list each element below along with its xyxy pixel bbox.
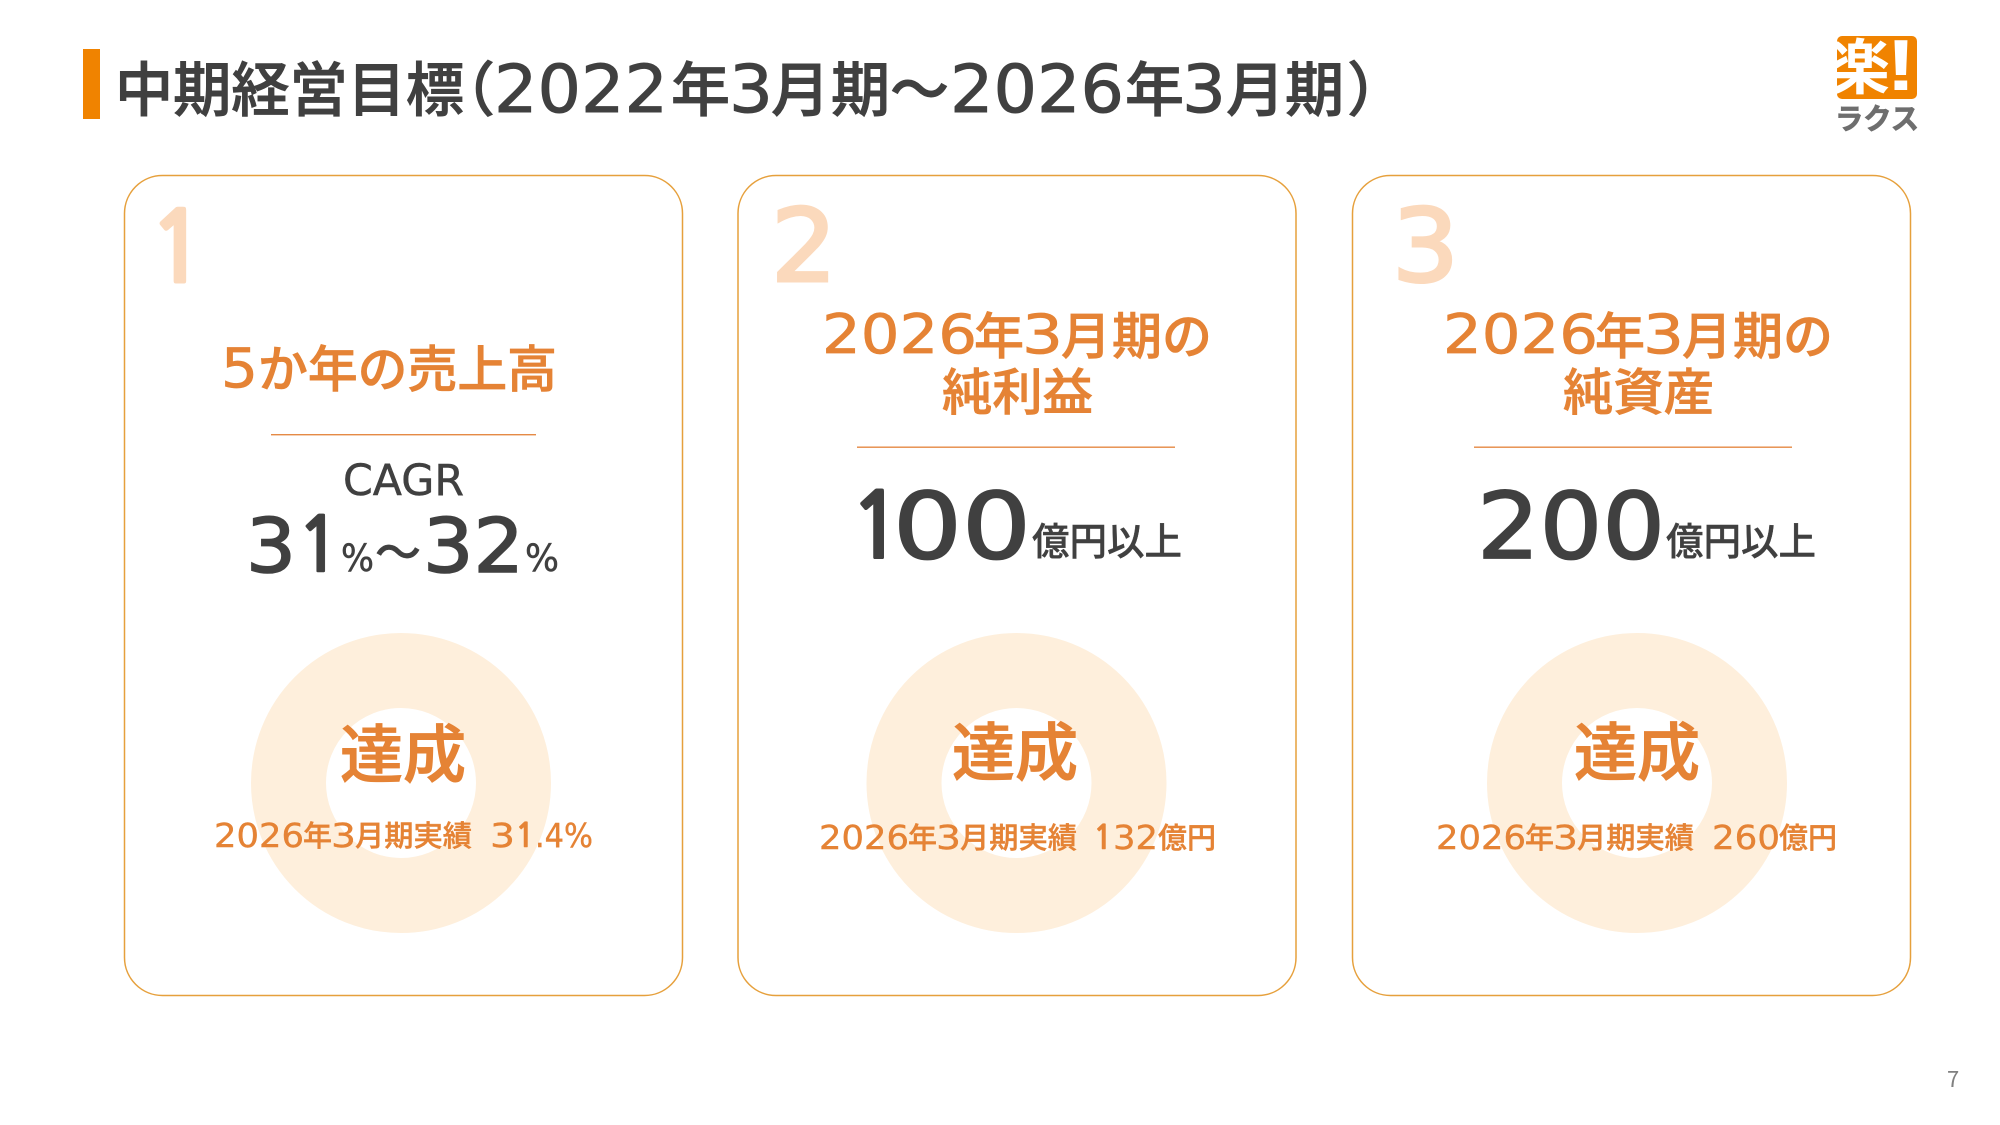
CAGR value: 3 [246, 502, 296, 590]
panel number: 2 [771, 187, 837, 305]
target value: 億円以上 [1032, 511, 1182, 566]
divider [1474, 446, 1792, 448]
CAGR value: ～ [375, 517, 421, 583]
panel heading [822, 297, 1212, 425]
divider [857, 446, 1175, 448]
CAGR value: 32 [423, 502, 524, 590]
CAGR value [246, 502, 559, 590]
title: 期 [1285, 43, 1344, 128]
actual result: 億円 [1158, 815, 1216, 857]
target value: 200 [1477, 473, 1665, 580]
title: 3 [729, 51, 773, 128]
achievement ring [1524, 670, 1750, 896]
panel: net income target [738, 176, 1296, 996]
actual result [214, 813, 593, 855]
card border [1352, 176, 1910, 996]
achieved label: 達成 [1574, 703, 1700, 794]
actual result: 3 [936, 818, 961, 857]
title: 中期経営目標 [115, 43, 464, 128]
panel heading: 月 [1682, 297, 1732, 369]
achieved label: 達成 [340, 705, 466, 796]
achievement ring [904, 670, 1129, 896]
title: 2026 [950, 51, 1124, 128]
actual result: 年 [1525, 815, 1554, 857]
panel heading: の [1783, 297, 1833, 369]
target value [1477, 473, 1816, 580]
achievement ring [288, 670, 514, 896]
target value: 00 [893, 473, 1031, 580]
achieved label: 達成 [952, 703, 1078, 794]
actual result: 32 [1113, 818, 1158, 857]
title: 年 [671, 43, 730, 128]
logo: ラクス [1835, 96, 1919, 138]
actual result: 2026 [1436, 818, 1526, 857]
panel heading: 期 [1733, 297, 1783, 369]
actual result: 月期実績 [1577, 815, 1694, 857]
actual result: 1 [1093, 821, 1113, 854]
page number: 7 [1947, 1062, 1959, 1094]
panel number: 1 [148, 200, 207, 297]
panel number: 3 [1392, 187, 1459, 305]
title: 期 [831, 43, 890, 128]
actual result [1436, 815, 1837, 857]
actual result: 年 [908, 815, 937, 857]
actual result: 1 [515, 819, 535, 852]
CAGR label: CAGR [343, 456, 464, 506]
logo: ! [1886, 26, 1916, 106]
actual result: 260 [1712, 818, 1780, 857]
title: ） [1347, 43, 1406, 128]
title: 月 [1226, 43, 1285, 128]
panel heading: 年 [974, 297, 1024, 369]
logo: 楽 [1830, 20, 1890, 107]
title accent bar [83, 49, 100, 119]
title: ～ [890, 43, 949, 128]
panel heading: 2026 [822, 303, 977, 366]
actual result [819, 815, 1216, 857]
CAGR value: 1 [296, 509, 342, 584]
panel: net assets target [1352, 176, 1910, 996]
actual result: 3 [331, 816, 356, 855]
target value: 1 [849, 481, 904, 572]
panel heading: か年の売上高 [258, 330, 557, 402]
panel heading: 純利益 [942, 353, 1093, 425]
title: 2022 [494, 51, 668, 128]
card border [124, 176, 682, 996]
panel heading: 年 [1595, 297, 1645, 369]
actual result: 年 [303, 813, 332, 855]
panel heading: 期 [1112, 297, 1162, 369]
logo [1837, 36, 1918, 132]
actual result: 3 [490, 816, 515, 855]
title: 3 [1182, 51, 1226, 128]
actual result: .4% [535, 816, 593, 855]
title: 年 [1125, 43, 1184, 128]
actual result: 3 [1553, 818, 1578, 857]
panel: 5-year revenue target [124, 176, 682, 996]
panel heading: 月 [1061, 297, 1111, 369]
title: （ [436, 43, 495, 128]
panel heading: 5 [221, 337, 258, 400]
actual result: 月期実績 [960, 815, 1077, 857]
actual result: 2026 [214, 816, 304, 855]
title: 月 [771, 43, 830, 128]
panel heading: 純資産 [1563, 353, 1714, 425]
card border [738, 176, 1296, 996]
target value [849, 473, 1182, 580]
actual result: 億円 [1779, 815, 1837, 857]
panel heading [1443, 297, 1833, 425]
actual result: 2026 [819, 818, 909, 857]
panel heading: 3 [1022, 303, 1063, 366]
actual result: 月期実績 [355, 813, 472, 855]
panel heading: の [1162, 297, 1212, 369]
CAGR value: % [341, 537, 374, 580]
target value: 億円以上 [1666, 511, 1816, 566]
panel heading: 3 [1643, 303, 1684, 366]
divider [271, 434, 536, 435]
CAGR value: % [525, 537, 559, 580]
title [115, 43, 1406, 128]
panel heading: 2026 [1443, 303, 1598, 366]
